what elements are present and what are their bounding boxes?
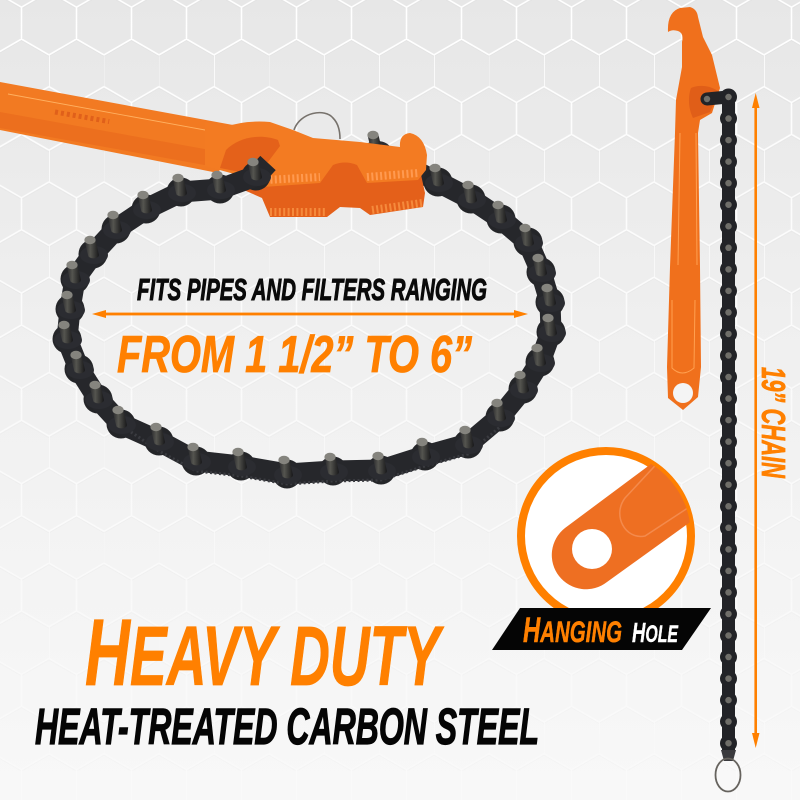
hanging hole callout: [492, 451, 711, 650]
wrench, vertical view: [667, 7, 720, 410]
arrow: chain length: [752, 93, 760, 748]
wrench handle and head, horizontal view: [0, 82, 427, 217]
handle bar: [0, 82, 240, 173]
text: fits pipes: FITS PIPES AND FILTERS RANGING: [137, 272, 487, 307]
heading: heavy duty: HEAVY DUTY: [85, 600, 445, 706]
chain tooth rim: [131, 427, 500, 484]
upper jaw and head: [205, 122, 427, 187]
chain plates: [67, 176, 551, 474]
detail circle: [521, 451, 691, 621]
key ring: [294, 113, 340, 139]
handle end detail: [552, 464, 690, 590]
banner text: hole: HOLE: [632, 617, 679, 648]
banner: [492, 608, 711, 650]
banner text: hanging: HANGING: [523, 611, 622, 650]
chain loop segment behind wrench head: [363, 131, 438, 182]
chain pins: [243, 158, 271, 186]
text: size range: FROM 1 1/2” TO 6”: [117, 326, 472, 384]
end ring: [716, 758, 740, 792]
vertical chain: [704, 96, 740, 792]
chain links: [67, 163, 551, 474]
text: chain length: 19” CHAIN: [755, 367, 792, 479]
lower jaw: [237, 150, 425, 217]
chain loop around pipe: [54, 158, 566, 484]
arrow: diameter: [92, 310, 528, 318]
